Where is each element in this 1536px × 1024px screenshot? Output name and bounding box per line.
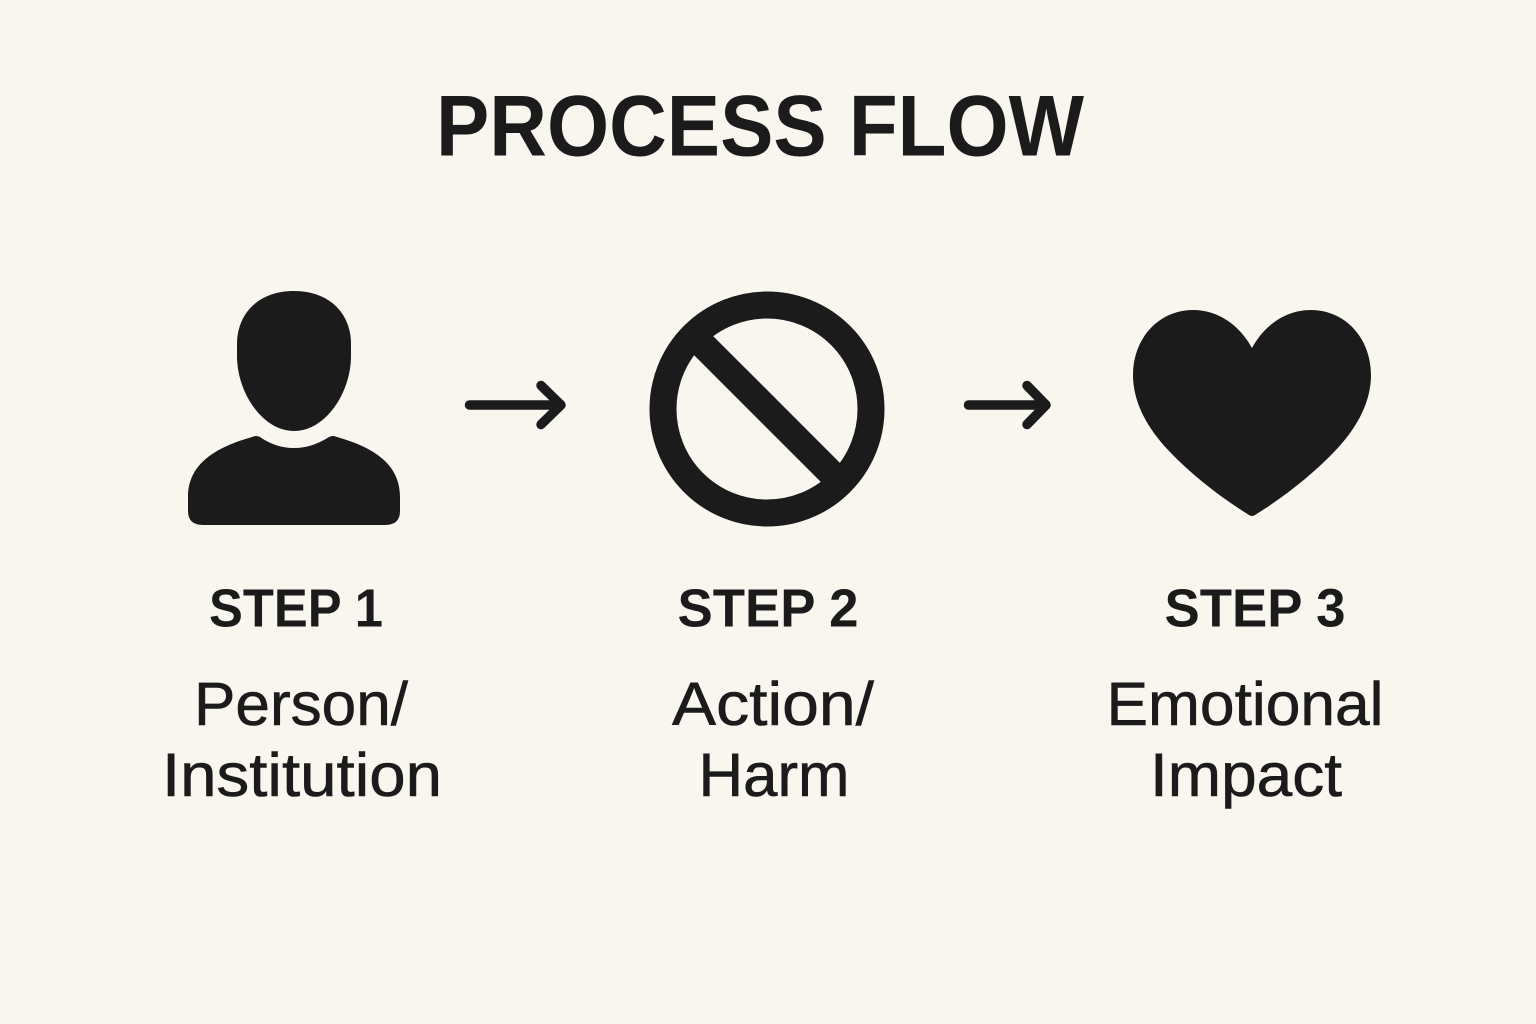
step 1 heading: STEP 1 bbox=[209, 578, 383, 638]
step 3 description: Emotional bbox=[1106, 670, 1384, 739]
step 2 description bbox=[672, 670, 875, 810]
step 2 description: Harm bbox=[698, 741, 850, 810]
icon: prohibition sign bbox=[663, 305, 871, 513]
step 1 description: Institution bbox=[162, 741, 442, 810]
title: PROCESS FLOW bbox=[436, 78, 1085, 174]
icon: person bbox=[188, 291, 400, 525]
step 2 label bbox=[672, 578, 875, 810]
step 3 description bbox=[1106, 670, 1384, 810]
arrow: step 1 to step 2 bbox=[470, 386, 561, 424]
step 3 description: Impact bbox=[1150, 741, 1342, 810]
step 1 description: Person/ bbox=[194, 670, 409, 739]
step 2 description: Action/ bbox=[672, 670, 875, 739]
icon: heart bbox=[1133, 310, 1371, 516]
step 1 description bbox=[162, 670, 442, 810]
step 3 heading: STEP 3 bbox=[1164, 578, 1346, 638]
arrow: step 2 to step 3 bbox=[968, 386, 1046, 424]
step 2 heading: STEP 2 bbox=[678, 578, 858, 638]
step 3 label bbox=[1106, 578, 1384, 810]
step 1 label bbox=[162, 578, 442, 810]
